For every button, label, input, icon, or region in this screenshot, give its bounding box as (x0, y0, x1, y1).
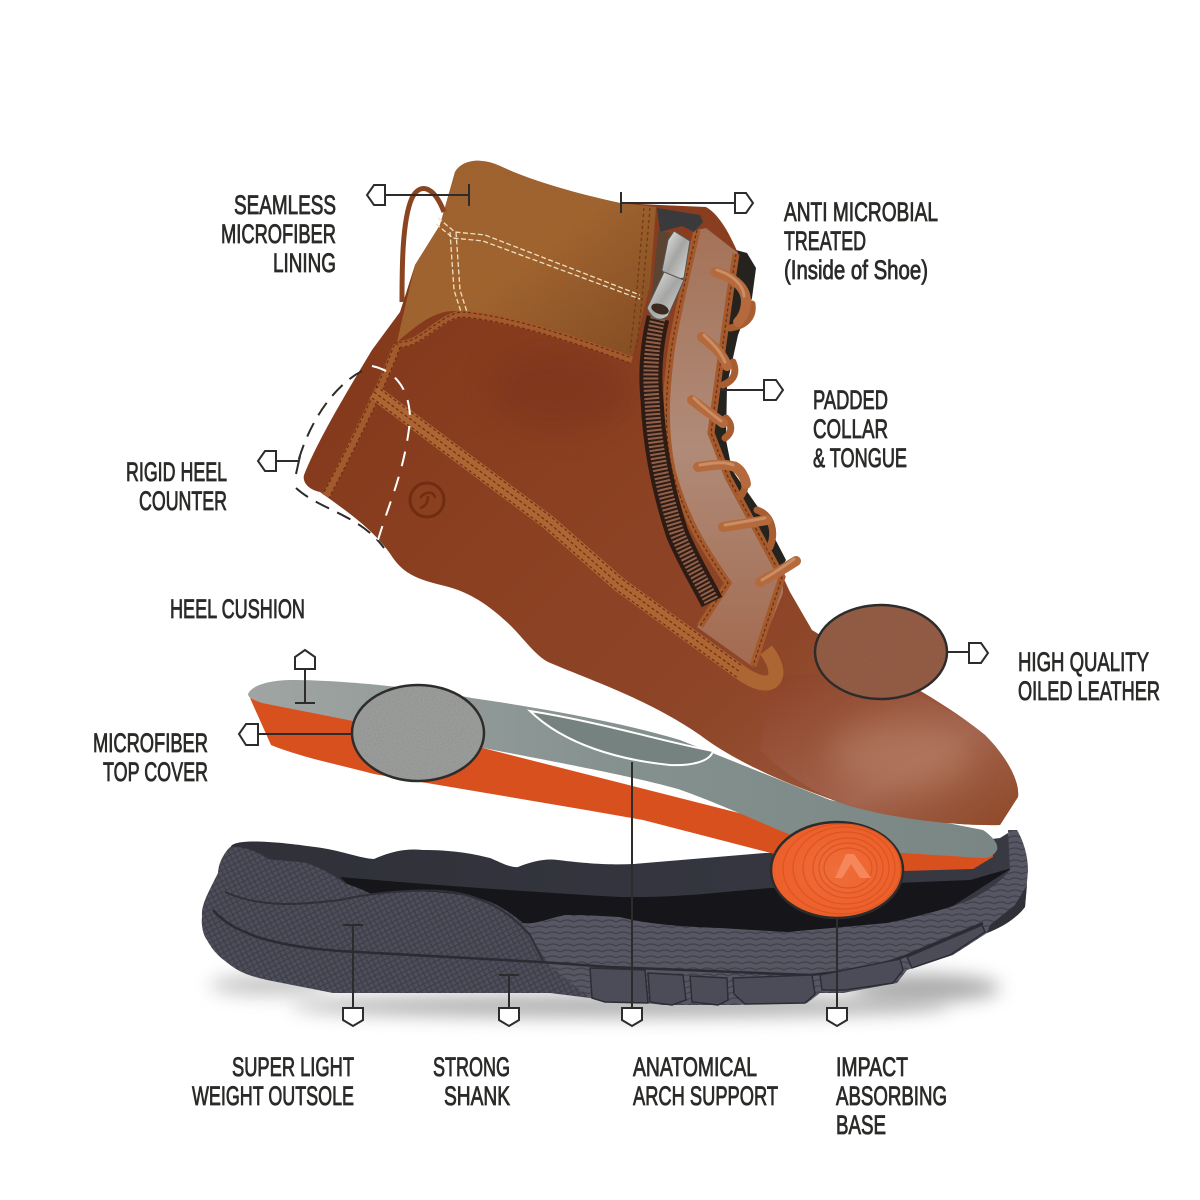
tongue dark edge (700, 250, 786, 578)
label: strong shank: SHANK (444, 1081, 510, 1111)
connector: seamless microfiber lining (367, 184, 469, 206)
label: microfiber top cover (93, 728, 208, 787)
heel back stitching (323, 345, 400, 498)
brand emblem (410, 483, 444, 517)
diagonal overlay band (374, 392, 776, 683)
label: anti microbial treated: (Inside of Shoe) (784, 255, 928, 285)
boot leather body (304, 161, 1018, 825)
label: impact absorbing base: ABSORBING (836, 1081, 947, 1111)
grain texture (353, 686, 483, 780)
heel dashes white (372, 366, 410, 540)
label: anatomical arch support (633, 1052, 778, 1111)
label: padded collar and tongue: COLLAR (813, 414, 888, 444)
logo mark (835, 854, 871, 878)
label: strong shank: STRONG (433, 1052, 510, 1082)
lace back strands (723, 304, 773, 547)
label: rigid heel counter: COUNTER (139, 486, 227, 516)
concentric rings (783, 824, 901, 914)
connector: strong shank (499, 975, 519, 1026)
lace front strands (715, 272, 746, 322)
leather collar seam stitching (399, 312, 632, 363)
outsole toe inner shade (987, 885, 1027, 933)
label: anti microbial treated: ANTI MICROBIAL (784, 197, 938, 227)
suede right seam (630, 208, 650, 352)
label: seamless microfiber lining (221, 190, 336, 278)
zipper tab hole (650, 301, 670, 317)
zipper upper tape (656, 232, 664, 312)
outsole inner lining (225, 833, 1020, 950)
label: impact absorbing base: BASE (836, 1110, 886, 1140)
label: impact absorbing base: IMPACT (836, 1052, 908, 1082)
connector: high quality leather (947, 643, 988, 663)
outsole forefoot wall with scale texture (523, 830, 1028, 1005)
label: padded collar and tongue (813, 385, 907, 473)
connector: super light outsole (343, 925, 363, 1026)
connector: heel cushion (295, 650, 315, 703)
heel dashes black (296, 371, 384, 548)
connector: padded collar (721, 380, 783, 400)
label: impact absorbing base (836, 1052, 947, 1140)
connector: impact absorbing base (827, 918, 847, 1026)
zipper slider (662, 231, 690, 280)
top lining gap (657, 208, 703, 232)
label: super light weight outsole: WEIGHT OUTSOLE (192, 1081, 354, 1111)
label: seamless microfiber lining: SEAMLESS (234, 190, 336, 220)
back pull loop (402, 189, 444, 302)
label: anti microbial treated (784, 197, 938, 285)
label: high quality oiled leather (1018, 647, 1160, 706)
callout: impact absorbing base lens (771, 822, 903, 918)
label: seamless microfiber lining: LINING (273, 248, 336, 278)
heel back band (326, 345, 397, 496)
callout: microfiber top cover lens (352, 685, 484, 781)
outsole heel panel seam (225, 891, 543, 961)
label: super light weight outsole: SUPER LIGHT (232, 1052, 354, 1082)
connector: rigid heel counter (258, 451, 300, 474)
label: rigid heel counter: RIGID HEEL (126, 457, 227, 487)
zipper track (651, 318, 712, 602)
diagonal overlay stitching (372, 386, 742, 678)
insole orange side (250, 698, 993, 871)
connector: microfiber top cover (239, 724, 352, 745)
lace highlights (694, 270, 794, 580)
zipper teeth (651, 318, 712, 602)
connector: anatomical arch support (622, 762, 642, 1026)
side lace panel (666, 228, 783, 667)
insole (248, 680, 997, 871)
connector: anti microbial (621, 192, 753, 213)
heel counter dashed outline (296, 366, 410, 548)
side panel edge band (666, 230, 782, 666)
arch support outline (530, 711, 713, 765)
suede collar stitching (436, 218, 640, 312)
outsole (202, 830, 1028, 1005)
label: anatomical arch support: ARCH SUPPORT (633, 1081, 778, 1111)
outsole ground shadow (210, 974, 1000, 1017)
label: anti microbial treated: TREATED (784, 226, 866, 256)
label: strong shank (433, 1052, 510, 1111)
label: microfiber top cover: TOP COVER (103, 757, 208, 787)
label: rigid heel counter (126, 457, 227, 516)
label: seamless microfiber lining: MICROFIBER (221, 219, 336, 249)
outsole dark footbed (340, 868, 1012, 940)
zipper pull (647, 231, 690, 319)
label: microfiber top cover: MICROFIBER (93, 728, 208, 758)
label: super light weight outsole (192, 1052, 354, 1111)
outsole midline ridge (213, 910, 983, 975)
boot (296, 161, 1018, 825)
suede grain (397, 161, 656, 358)
zipper tab (647, 272, 684, 319)
boot toe sheen (830, 721, 970, 789)
outsole tread lugs (590, 925, 985, 1005)
label: anatomical arch support: ANATOMICAL (633, 1052, 757, 1082)
side panel stitching (666, 230, 782, 666)
label: padded collar and tongue: & TONGUE (813, 443, 907, 473)
insole grey top cover (248, 680, 997, 858)
laces (692, 270, 796, 582)
outsole heel wall with mesh texture (202, 847, 650, 998)
boot dark leather blotch (490, 350, 630, 430)
boot toe highlight (760, 674, 1018, 825)
leather collar seam band (398, 314, 632, 360)
label: heel cushion: HEEL CUSHION (170, 594, 305, 624)
callout: oiled leather lens (815, 605, 947, 699)
boot suede collar (397, 161, 656, 358)
label: padded collar and tongue: PADDED (813, 385, 888, 415)
leather grain texture (816, 606, 946, 698)
